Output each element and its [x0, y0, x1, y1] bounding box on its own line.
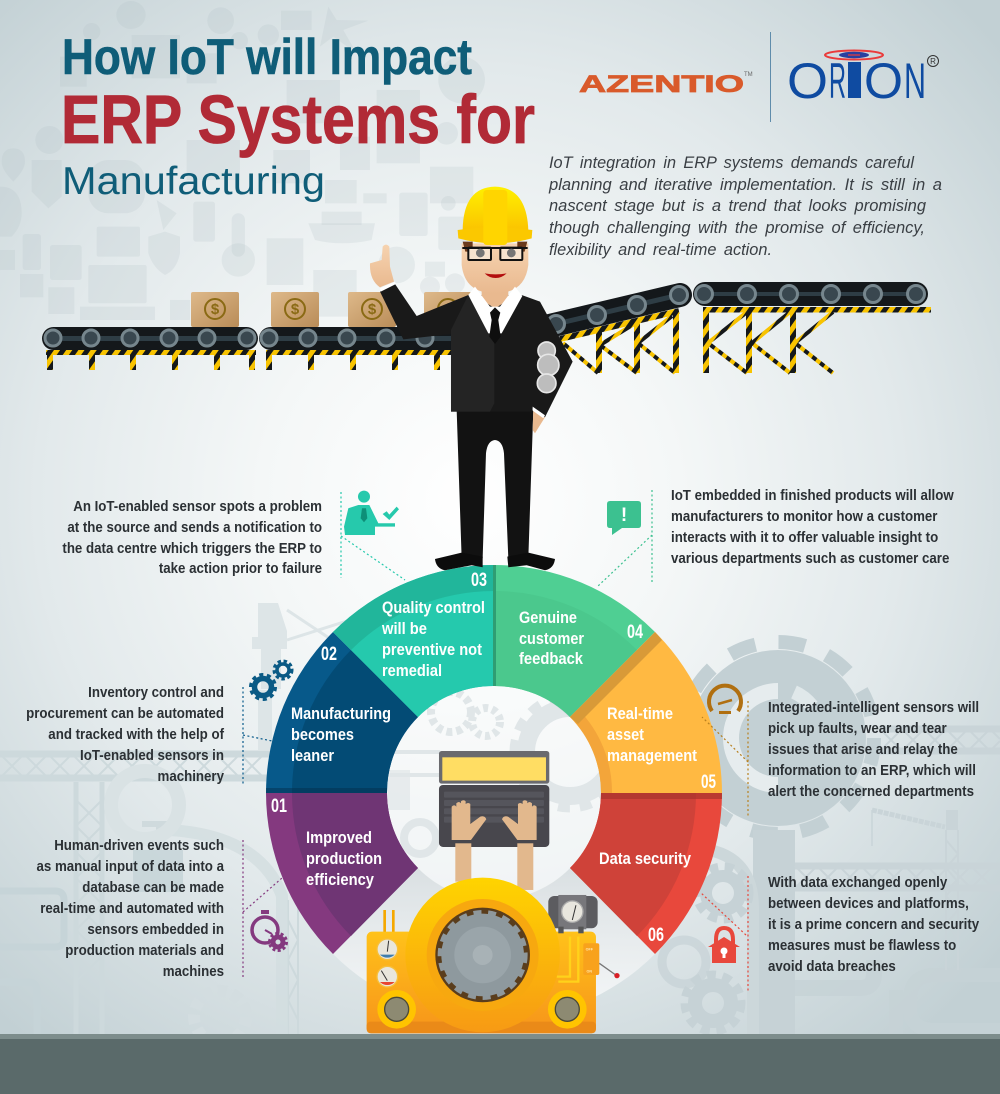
- callout text: sensor notification: the data centre which triggers the ERP to: [62, 540, 322, 557]
- laptop with hands: [439, 751, 549, 890]
- sector 04: feedback: [519, 649, 583, 668]
- sector 02: becomes: [291, 725, 354, 744]
- glasses: [462, 248, 528, 260]
- knobs: [377, 990, 587, 1029]
- callout text: finished products: IoT embedded in finished products will allow: [671, 487, 955, 504]
- sector 05: 05: [701, 772, 716, 793]
- callout text: sensor notification: at the source and sends a notification to: [67, 519, 322, 536]
- worker figure: [370, 187, 573, 570]
- logo: Azentio: [579, 71, 753, 98]
- sector 01: Improved: [306, 828, 372, 847]
- title line 2: ERP Systems for: [61, 81, 535, 158]
- icon: speech bubble alert: !: [621, 505, 627, 526]
- sector 03: remedial: [382, 661, 442, 680]
- callout text: data exchange: avoid data breaches: [768, 958, 896, 975]
- callout text: sensor notification: take action prior to failure: [159, 560, 322, 577]
- icon: speedometer: [709, 686, 741, 714]
- title line 3: Manufacturing: [62, 160, 325, 203]
- sector 04: Genuine: [519, 608, 577, 627]
- tie: [489, 307, 501, 344]
- floor band: [0, 1034, 1000, 1094]
- big gear: [682, 642, 874, 834]
- intro paragraph: IoT integration in ERP systems demands careful: [549, 153, 915, 172]
- callout text: integrated sensors: pick up faults, wear and tear: [768, 720, 947, 737]
- lever: ON: [587, 970, 592, 974]
- sector 05: asset: [607, 725, 644, 744]
- logo: Orion: O: [787, 53, 828, 109]
- callout text: human-driven: sensors embedded in: [87, 921, 224, 938]
- rising conveyor: [545, 286, 688, 373]
- callout text: data exchange: measures must be flawless to: [768, 937, 957, 954]
- sector 04: customer: [519, 629, 584, 648]
- sector 03: Quality control: [382, 598, 485, 617]
- callout text: data exchange: [768, 874, 979, 975]
- sector 01: production: [306, 849, 382, 868]
- lever: [557, 937, 620, 982]
- sector 06: 06: [648, 925, 664, 946]
- callout text: sensor notification: [62, 498, 322, 577]
- right trusses: [795, 729, 1000, 970]
- logo: Orion: [787, 50, 938, 109]
- sector 01: efficiency: [306, 870, 374, 889]
- intro paragraph: flexibility and real-time action.: [549, 240, 772, 259]
- sector 03: 03: [471, 570, 487, 591]
- callout text: inventory: Inventory control and: [88, 684, 224, 701]
- sector 03: preventive not: [382, 640, 482, 659]
- callout text: inventory: and tracked with the help of: [48, 726, 224, 743]
- gears inside ring: [404, 692, 626, 854]
- right side pipes: [695, 848, 753, 1034]
- sector 02: leaner: [291, 746, 334, 765]
- cardboard boxes: $: [444, 301, 453, 318]
- conveyor belts: [42, 282, 931, 373]
- cardboard boxes: [191, 292, 472, 327]
- icon: padlock house: [708, 928, 740, 963]
- jacket flap: [451, 295, 494, 412]
- callout text: finished products: [671, 487, 955, 567]
- icon: stopwatch and gear: [252, 910, 286, 950]
- cuff: [380, 282, 396, 292]
- cardboard boxes: $: [368, 301, 377, 318]
- dotted leader lines: [243, 490, 748, 993]
- lever: OFF: [586, 948, 594, 952]
- logo: Azentio: AZENTIO: [579, 71, 744, 98]
- sector 05: [570, 632, 722, 793]
- sector 04: [493, 565, 655, 717]
- callout text: data exchange: With data exchanged openly: [768, 874, 947, 891]
- lower right gears: [662, 867, 749, 1031]
- shirt: [468, 287, 522, 333]
- callout text: human-driven: real-time and automated with: [40, 900, 224, 917]
- sector 04: 04: [627, 622, 643, 643]
- callout text: data exchange: it is a prime concern and security: [768, 916, 979, 933]
- sector 03: [333, 565, 494, 717]
- callout text: human-driven: database can be made: [82, 879, 224, 896]
- callout text: inventory: [26, 684, 224, 785]
- callout text: finished products: interacts with it to offer valuable insight to: [671, 529, 938, 546]
- callout text: finished products: various departments such as customer care: [671, 550, 949, 567]
- callout text: inventory: machinery: [158, 768, 224, 785]
- intro paragraph: nascent stage but is a trend that looks promising: [549, 196, 927, 215]
- sector 01: 01: [271, 796, 287, 817]
- callout text: sensor notification: An IoT-enabled sensor spots a problem: [73, 498, 322, 515]
- sector 06: [570, 793, 722, 954]
- machine pipes: [385, 910, 393, 933]
- logo: Orion: R: [829, 53, 846, 109]
- faint technology icons background: [0, 1, 485, 320]
- upper right conveyor: [693, 282, 931, 373]
- ring of six sectors: [266, 565, 722, 1021]
- callout text: human-driven: as manual input of data into a: [37, 858, 225, 875]
- sector 02: Manufacturing: [291, 704, 391, 723]
- sector 02: 02: [321, 644, 337, 665]
- cardboard boxes: $: [211, 301, 220, 318]
- callout text: human-driven: [37, 837, 225, 980]
- logo: Orion: I: [847, 53, 862, 109]
- faint industrial background: gears, cranes, pipes: [0, 603, 1000, 1043]
- icon: manager with check: [344, 491, 399, 535]
- callout text: human-driven: Human-driven events such: [54, 837, 224, 854]
- intro paragraph: though challenging with the promise of efficiency,: [549, 218, 925, 237]
- sector 05: management: [607, 746, 697, 765]
- callout text: human-driven: machines: [163, 963, 224, 980]
- sector 02: [266, 632, 418, 793]
- callout text: human-driven: production materials and: [65, 942, 224, 959]
- intro paragraph: planning and iterative implementation. It is still in a: [548, 175, 942, 194]
- cardboard boxes: $: [291, 301, 300, 318]
- logo: Orion: N: [904, 53, 926, 109]
- left valve and pipes: [133, 850, 183, 892]
- icon: gears: [251, 661, 292, 699]
- intro paragraph: [548, 153, 942, 259]
- robot gear badge: [537, 342, 559, 393]
- lower hand: [533, 410, 545, 433]
- sector 03: will be: [381, 619, 427, 638]
- machine body: [367, 932, 596, 1033]
- machine: [367, 878, 620, 1033]
- logo: Orion: O: [864, 53, 903, 109]
- lower disc section: [333, 868, 655, 1021]
- sector 06: Data security: [599, 849, 691, 868]
- title: [61, 29, 535, 203]
- left conveyors: [42, 327, 475, 370]
- callout text: data exchange: between devices and platforms,: [768, 895, 969, 912]
- helmet: [458, 187, 532, 245]
- sector 01: [266, 793, 418, 954]
- title line 1: How IoT will Impact: [62, 29, 472, 85]
- shoes: [435, 553, 555, 570]
- callout text: integrated sensors: [768, 699, 979, 800]
- top right gauge: [548, 895, 598, 933]
- sector 05: Real-time: [607, 704, 673, 723]
- thumbs-up hand: [370, 245, 394, 287]
- logo: Azentio: TM: [744, 72, 753, 78]
- logo: Orion: R: [930, 57, 936, 66]
- neck and face: [482, 280, 508, 308]
- callout text: finished products: manufacturers to monitor how a customer: [671, 508, 938, 525]
- crane tower: [252, 603, 287, 689]
- callout text: integrated sensors: alert the concerned departments: [768, 783, 974, 800]
- dial gauges: [377, 939, 398, 987]
- logos: [579, 32, 938, 122]
- icon: speech bubble alert: [607, 501, 641, 535]
- callout text: integrated sensors: information to an ERP, which will: [768, 762, 976, 779]
- callout text: inventory: IoT-enabled sensors in: [80, 747, 224, 764]
- left trusses and crane: [0, 610, 350, 1034]
- callout text: integrated sensors: issues that arise and relay the: [768, 741, 958, 758]
- big wheel: [405, 878, 560, 1032]
- callout text: inventory: procurement can be automated: [26, 705, 224, 722]
- mouth: [485, 273, 507, 278]
- jacket: [380, 284, 573, 417]
- callout text: integrated sensors: Integrated-intelligent sensors will: [768, 699, 979, 716]
- legs: [457, 410, 533, 558]
